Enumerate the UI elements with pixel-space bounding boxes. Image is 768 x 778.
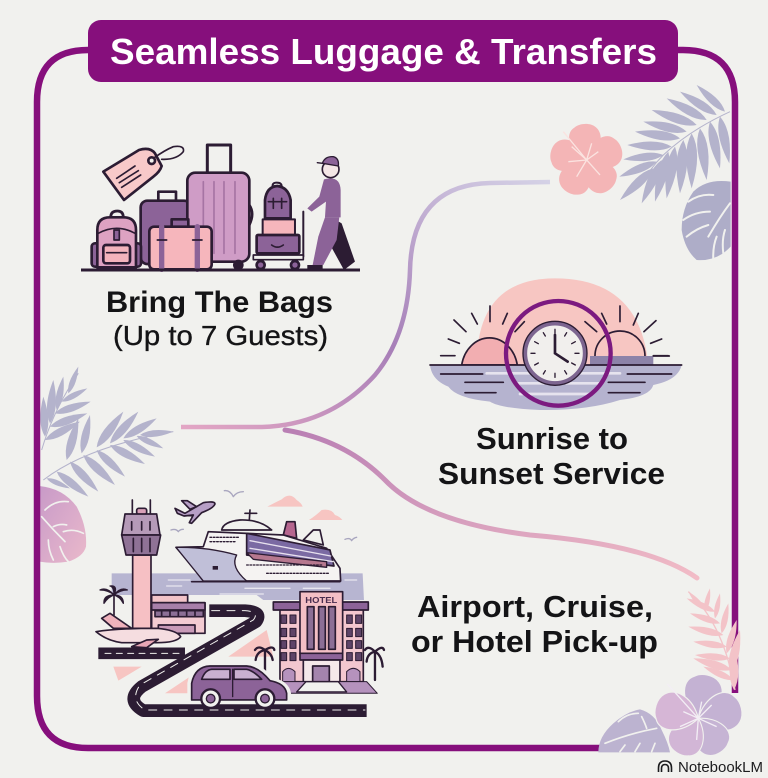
tall suitcase (187, 145, 252, 269)
title banner: Seamless Luggage & Transfers (110, 31, 657, 72)
clock (523, 321, 587, 385)
monstera leaf: bottom right (598, 709, 670, 752)
runway (98, 636, 185, 671)
heading: sunrise to sunset: Sunset Service (438, 456, 665, 491)
terminal building (152, 595, 205, 633)
car (190, 664, 288, 708)
sun rays (441, 306, 668, 356)
clouds and birds (171, 491, 357, 541)
hibiscus: top right (547, 123, 627, 200)
right sun (595, 331, 645, 356)
luggage tag (103, 146, 184, 200)
heading: bring the bags: Bring The Bags (106, 286, 333, 319)
water (112, 573, 364, 600)
palm: airport (100, 586, 127, 615)
airliner (96, 613, 181, 648)
heading: sunrise to sunset: Sunrise to (476, 421, 628, 456)
winding road (134, 611, 367, 711)
heading: bring the bags: (Up to 7 Guests) (113, 320, 328, 351)
water (430, 365, 682, 410)
icon: sunrise to sunset clock (430, 278, 682, 410)
ground line (81, 268, 360, 272)
heading: bring the bags (106, 286, 333, 351)
icon: airport, cruise and hotel scene (96, 491, 384, 711)
monstera leaf: top right (682, 181, 731, 260)
hotel (270, 592, 377, 693)
heading: pick-up (411, 589, 658, 659)
palm: hotel right (365, 648, 384, 680)
palm frond: bottom right (685, 588, 744, 690)
icon: luggage group (92, 145, 355, 270)
hotel: HOTEL (305, 595, 338, 605)
title banner (88, 20, 678, 82)
purple ring (506, 301, 611, 406)
left sun (462, 338, 517, 365)
monstera leaf: left (39, 486, 86, 563)
heading: pick-up: Airport, Cruise, (417, 589, 653, 624)
connector: bags branch (181, 182, 550, 427)
trolley with bags (253, 183, 303, 269)
palm: hotel left (255, 647, 274, 677)
heading: sunrise to sunset (438, 421, 665, 491)
cruise ship (176, 510, 341, 582)
pink case (149, 219, 212, 269)
palm fronds: left (39, 366, 174, 500)
pink ground patches (113, 630, 273, 693)
porter figure (307, 157, 355, 270)
NotebookLM watermark: NotebookLM (678, 759, 763, 776)
big sun (477, 278, 648, 365)
control tower (122, 500, 161, 628)
palm frond: top right (617, 82, 734, 205)
connector: pick-up branch (285, 430, 697, 578)
purple suitcase (141, 192, 191, 264)
heading: pick-up: or Hotel Pick-up (411, 624, 658, 659)
small plane (175, 501, 215, 523)
hibiscus: bottom right (651, 672, 746, 762)
backpack (92, 211, 141, 267)
